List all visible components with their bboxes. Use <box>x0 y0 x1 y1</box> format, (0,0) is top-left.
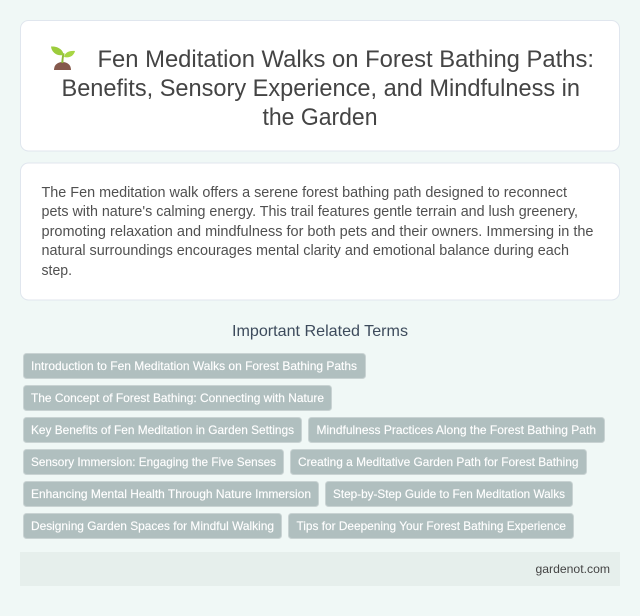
title: Fen Meditation Walks on Forest Bathing Paths: <box>98 46 594 73</box>
icon: seedling <box>51 46 75 70</box>
tag: enhancing mental health: Enhancing Mental Health Through Nature Immersion <box>31 487 311 501</box>
description text: The Fen meditation walk offers a serene forest bathing path designed to reconnect <box>42 185 567 201</box>
title: the Garden <box>262 104 378 131</box>
title: Benefits, Sensory Experience, and Mindfulness in <box>62 75 580 102</box>
tag: enhancing mental health <box>24 482 318 506</box>
tag: introduction: Introduction to Fen Meditation Walks on Forest Bathing Paths <box>31 359 357 373</box>
tag: designing garden spaces <box>24 514 282 538</box>
tag: mindfulness practices: Mindfulness Practices Along the Forest Bathing Path <box>316 423 596 437</box>
tag: designing garden spaces: Designing Garden Spaces for Mindful Walking <box>31 519 274 533</box>
tag: introduction <box>24 354 366 378</box>
tag: concept of forest bathing: The Concept of Forest Bathing: Connecting with Nature <box>31 391 324 405</box>
panel: description card <box>20 163 620 300</box>
tag: tips for deepening <box>288 514 574 538</box>
footer <box>20 552 620 586</box>
tag: sensory immersion: Sensory Immersion: Engaging the Five Senses <box>31 455 276 469</box>
tag: sensory immersion <box>24 450 284 474</box>
description text: pets with nature's calming energy. This trail features gentle terrain and lush greenery, <box>42 204 578 220</box>
description text: promoting relaxation and mindfulness for both pets and their owners. Immersing in the <box>42 224 594 240</box>
heading: important related terms: Important Related Terms <box>232 323 408 340</box>
related terms tags <box>24 354 604 538</box>
description text: natural surroundings encourages mental clarity and emotional balance during each <box>42 243 569 259</box>
tag: meditative garden path <box>290 450 586 474</box>
tag: mindfulness practices <box>308 418 604 442</box>
description text: step. <box>42 263 72 279</box>
tag: step-by-step guide <box>326 482 572 506</box>
footer: site name: gardenot.com <box>536 562 610 576</box>
tag: meditative garden path: Creating a Meditative Garden Path for Forest Bathing <box>298 455 578 469</box>
tag: concept of forest bathing <box>24 386 332 410</box>
tag: key benefits: Key Benefits of Fen Meditation in Garden Settings <box>31 423 294 437</box>
tag: step-by-step guide: Step-by-Step Guide to Fen Meditation Walks <box>333 487 565 501</box>
tag: tips for deepening: Tips for Deepening Your Forest Bathing Experience <box>296 519 566 533</box>
description text <box>42 185 594 279</box>
title <box>62 46 594 131</box>
tag: key benefits <box>24 418 302 442</box>
panel: title card <box>20 20 620 151</box>
